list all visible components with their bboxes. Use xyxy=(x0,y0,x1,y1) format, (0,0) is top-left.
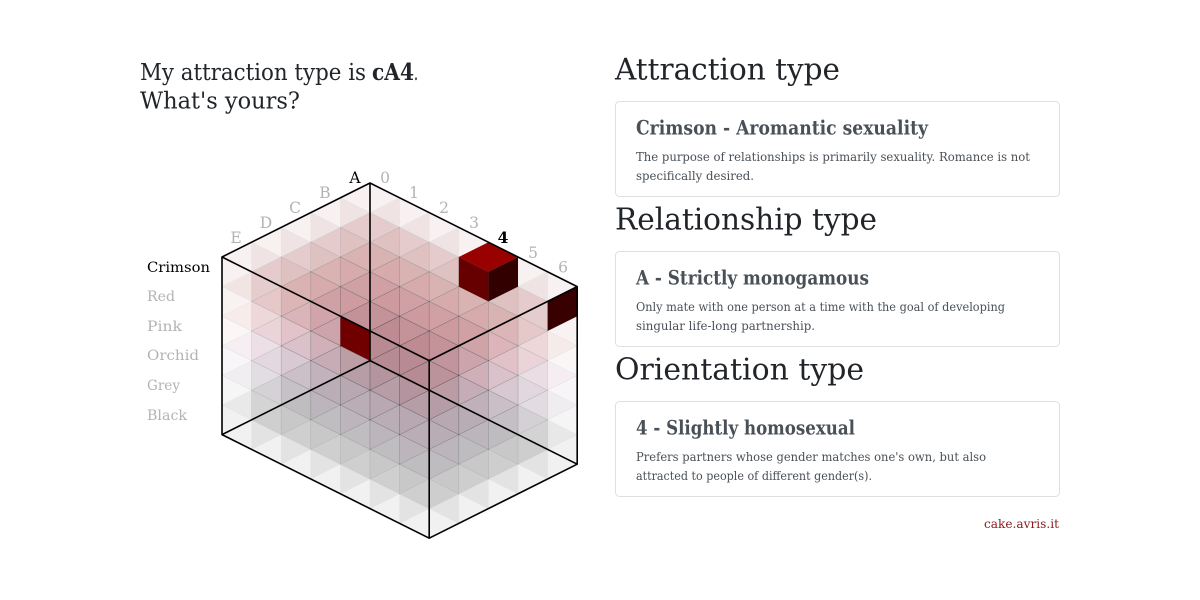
axis labels: orientation numbers: 1 xyxy=(409,184,419,202)
card: slightly homosexual xyxy=(616,402,1060,496)
row labels: attraction colours: Pink xyxy=(147,319,183,335)
row labels: attraction colours: Grey xyxy=(147,378,180,394)
axis labels: relationship letters: A xyxy=(348,169,361,187)
axis labels: orientation numbers: 4 xyxy=(498,228,509,247)
axis labels: relationship letters xyxy=(230,169,361,247)
card: crimson: specifically desired. xyxy=(636,168,754,183)
title: my attraction type: My attraction type is xyxy=(140,60,366,86)
card: slightly homosexual: attracted to people of different gender(s). xyxy=(636,468,872,483)
axis labels: relationship letters: C xyxy=(289,199,301,217)
title: my attraction type: What's yours? xyxy=(140,88,300,114)
row labels: attraction colours xyxy=(147,260,210,424)
axis labels: relationship letters: D xyxy=(260,214,272,232)
card: strictly monogamous: A - Strictly monogamous xyxy=(635,266,869,290)
card: strictly monogamous: singular life-long partnership. xyxy=(636,318,815,333)
axis labels: orientation numbers: 6 xyxy=(558,258,568,276)
selected cube: cA4 xyxy=(459,242,518,301)
card: slightly homosexual: 4 - Slightly homosexual xyxy=(636,416,855,440)
title: my attraction type: . xyxy=(414,60,418,86)
projection on left wall xyxy=(340,316,370,361)
row labels: attraction colours: Red xyxy=(147,289,175,305)
title: my attraction type xyxy=(140,59,418,114)
axis labels: orientation numbers: 2 xyxy=(439,199,449,217)
isometric cube grid xyxy=(222,183,577,538)
card: strictly monogamous: Only mate with one person at a time with the goal of developing xyxy=(636,299,1005,314)
card: slightly homosexual: Prefers partners whose gender matches one's own, but also xyxy=(636,449,986,464)
site link: cake.avris.it xyxy=(984,516,1059,531)
row labels: attraction colours: Orchid xyxy=(147,348,199,364)
heading: relationship type: Relationship type xyxy=(615,202,877,238)
row labels: attraction colours: Crimson xyxy=(147,260,210,276)
axis labels: orientation numbers: 0 xyxy=(380,169,390,187)
projection on right wall xyxy=(548,287,577,331)
card: strictly monogamous xyxy=(616,252,1060,346)
axis labels: relationship letters: B xyxy=(319,184,331,202)
heading: orientation type: Orientation type xyxy=(615,352,864,388)
axis labels: relationship letters: E xyxy=(230,229,242,247)
heading: attraction type: Attraction type xyxy=(614,52,840,88)
cube outline xyxy=(222,183,577,538)
card: crimson: The purpose of relationships is primarily sexuality. Romance is not xyxy=(636,149,1030,164)
axis labels: orientation numbers xyxy=(380,169,568,276)
axis labels: orientation numbers: 5 xyxy=(528,244,538,262)
card: crimson xyxy=(616,102,1060,196)
row labels: attraction colours: Black xyxy=(147,408,188,424)
title: my attraction type: cA4 xyxy=(372,59,414,86)
axis labels: orientation numbers: 3 xyxy=(469,214,479,232)
card: crimson: Crimson - Aromantic sexuality xyxy=(636,116,929,140)
